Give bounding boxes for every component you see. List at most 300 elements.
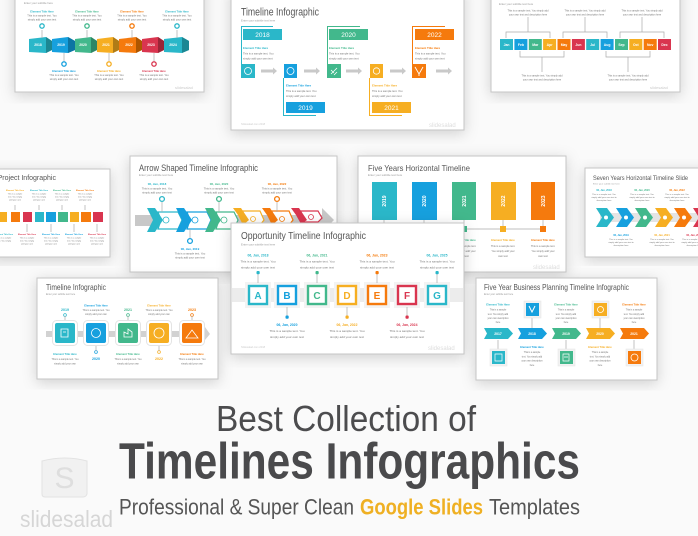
descriptions below [522,74,649,82]
lower descriptions: simply add your own [54,362,77,366]
upper dates: simply add your own text to [664,196,690,199]
upper descriptions: Element Title Here [30,189,49,192]
upper descriptions: This is a sample [490,310,507,312]
top labels and markers [27,10,192,61]
date markers: This is a sample text. You [175,252,206,256]
upper dates: This is a sample text. You [299,260,335,264]
lower descriptions: Element Title Here [588,345,612,349]
lower descriptions: This is a sample text. You [51,358,79,361]
chevrons [596,208,698,227]
year bars: 2020 [422,195,428,207]
lower descriptions [0,233,107,246]
upper dates [240,254,455,270]
lower dates: description here [614,244,629,247]
upper dates: This is a sample text. You [592,193,617,196]
panel: left project timeline slide [0,169,110,257]
slide subtitle: Enter your subtitle text here [241,18,276,22]
milestone 2019 [284,64,325,116]
upper descriptions: text. You simply [55,196,69,198]
gray band [600,213,698,222]
slide subtitle: Enter your subtitle text here [139,173,174,177]
lower descriptions: This is a sample [592,352,609,354]
logo: slidesalad: slidesalad [20,506,113,532]
upper dates: description here [670,199,685,202]
milestone 2022: Element Title Here [415,46,441,50]
lower dates: 06, Jan, 2019 [613,234,629,237]
milestone 2018: This is a sample text. You [243,52,274,56]
panel: arrow shaped timeline slide [130,156,337,272]
letter boxes A to G: D [343,291,351,302]
top labels and markers: simply add your own text [163,18,192,22]
top labels and markers: This is a sample text. You [162,14,192,18]
year arrows: 2017 [494,332,502,336]
milestone 2020: Element Title Here [329,46,355,50]
slide footer: Slidesalad.com 2018 [241,122,266,126]
upper descriptions: simply add your own [85,313,108,316]
upper descriptions: This is a sample [558,310,575,312]
lower descriptions: add your own [91,244,103,246]
lower descriptions: your own description [521,360,543,362]
panel: seven years horizontal timeline slide [585,168,698,257]
element descriptions: own text [459,254,469,258]
year arrows: 2020 [596,332,604,336]
lower descriptions: Element Title Here [65,233,84,236]
chevrons [147,208,322,232]
3D year bars: 2019 [57,43,65,47]
upper descriptions: your own description [555,317,577,320]
milestone 2018: Element Title Here [243,46,269,50]
element descriptions: own text [498,254,508,258]
descriptions above: This is a sample text. You simply add [622,10,663,12]
upper descriptions [486,302,646,324]
upper dates: This is a sample text. You [419,260,455,264]
lower dates: simply add your own text to [649,241,675,244]
upper dates: This is a sample text. You [665,193,690,196]
month boxes: Jul [590,43,595,47]
icon tiles [490,301,643,366]
logo: slidesalad [20,458,113,532]
upper descriptions: Element Title Here [53,189,72,192]
month boxes: Nov [647,43,654,47]
lower descriptions: add your own [68,244,80,246]
slide subtitle: Enter your subtitle text here [499,2,534,6]
lower descriptions: This is a sample [20,238,35,240]
slide footer: Slidesalad.com 2018 [241,345,266,349]
3D year bars: 2022 [125,43,133,47]
year bars: 2019 [382,195,388,207]
3D year bars: 2021 [102,43,110,47]
connector brackets [506,17,664,72]
upper dates: simply add your own text to [591,196,617,199]
lower descriptions: This is a sample [90,238,105,240]
milestone 2019: This is a sample text. You [286,89,317,93]
panel: top-right monthly timeline slide [491,0,680,92]
top labels and markers: Element Title Here [30,10,54,14]
lower descriptions: add your own [21,244,33,246]
date markers: simply add your own text [204,190,234,194]
lower descriptions: Element Title Here [88,233,107,236]
upper descriptions: here [564,321,569,324]
upper dates: simply add your own text [300,266,334,270]
3D year bars: 2024 [169,43,177,47]
lower descriptions: This is a sample text. You [178,358,206,361]
date markers: simply add your own text [142,190,172,194]
upper descriptions: add your own [56,200,68,202]
descriptions above: your own text and description here [509,14,548,16]
lower descriptions: This is a sample [44,238,59,240]
upper dates: 06, Jan, 2018 [596,189,612,192]
year bars: 2021 [462,195,468,207]
date markers: simply add your own text [262,190,292,194]
lower dates: 06, Jan, 2021 [654,234,670,237]
letter boxes A to G: G [433,291,441,302]
upper descriptions: Element Title Here [147,304,171,308]
upper descriptions: your own description [487,317,509,320]
milestone 2019: Element Title Here [286,84,312,88]
upper dates: 06, Jan, 2023 [367,254,388,258]
date markers: This is a sample text. You [142,186,173,190]
upper descriptions: text. You simply add [624,313,645,316]
month boxes: Jan [504,43,509,47]
slide title: Arrow Shaped Timeline Infographic [139,163,258,173]
upper dates: 06, Jan, 2021 [307,254,328,258]
upper descriptions: text. You simply [78,196,92,198]
upper descriptions: Element Title Here [554,302,578,306]
letter boxes A to G: C [313,291,321,302]
milestone 2020: simply add your own text [329,56,359,60]
date markers: 06, Jan, 2019 [181,247,200,251]
element descriptions: You simply add your [491,249,515,253]
panel: top-left 3D timeline slide [15,0,204,92]
upper descriptions: text. You simply [8,196,22,198]
upper descriptions: This is a sample [8,194,23,196]
lower dates [608,234,698,247]
top labels and markers: This is a sample text. You [72,14,102,18]
upper descriptions: This is a sample [55,194,70,196]
lower descriptions: Element Title Here [18,233,37,236]
upper descriptions: This is a sample text. You [82,309,110,312]
upper descriptions [6,189,95,202]
year arrows: 2021 [630,332,638,336]
top labels and markers: This is a sample text. You [117,14,147,18]
bottom labels and markers: Element Title Here [97,69,121,73]
bottom labels and markers: Element Title Here [52,69,76,73]
slide watermark: slidesalad [429,123,456,129]
gray arrow band [135,208,334,232]
upper descriptions: text. You simply add [556,313,577,316]
lower descriptions: Element Title Here [116,352,140,356]
lower descriptions: This is a sample [67,238,82,240]
month boxes: Sep [618,43,625,47]
upper descriptions: Element Title Here [6,189,25,192]
3D year bars: 2018 [34,43,42,47]
lower descriptions: text. You simply add [522,356,543,358]
year arrows: 2018 [528,332,536,336]
top labels and markers: This is a sample text. You [27,14,57,18]
upper descriptions: This is a sample [626,310,643,312]
upper dates: This is a sample text. You [240,260,276,264]
upper descriptions: simply add your own [148,313,171,316]
top labels and markers: simply add your own text [118,18,147,22]
tagline: Google Slides [360,494,483,520]
lower descriptions: text. You simply [67,240,81,242]
upper descriptions: add your own [79,200,91,202]
lower descriptions [51,352,206,366]
milestone 2022 [412,26,454,78]
bottom labels and markers: simply add your own text [50,77,79,81]
bottom labels and markers: This is a sample text. You [94,73,124,77]
lower dates: This is a sample text. You [650,238,675,241]
descriptions below: your own text and description here [523,78,562,82]
upper dates: 06, Jan, 2018 [248,254,269,258]
milestone 2021: This is a sample text. You [372,89,403,93]
lower dates: simply add your own text [390,335,424,339]
year labels and markers: 2020 [92,357,100,361]
upper dates: description here [597,199,612,202]
bottom labels and markers: Element Title Here [142,69,166,73]
milestone 2020: 2020 [341,32,356,39]
month boxes: Feb [518,43,524,47]
year bars: 2023 [541,195,547,207]
slide subtitle: Enter your subtitle text here [593,182,621,186]
upper descriptions: Element Title Here [84,304,108,308]
upper descriptions: Element Title Here [486,302,510,306]
slide watermark: slidesalad [428,346,455,352]
top labels and markers: Element Title Here [165,10,189,14]
upper descriptions: here [496,321,501,324]
heading: best collection of: Best Collection of [216,398,477,439]
slide subtitle: Enter your subtitle text here [484,293,514,296]
tagline: Templates [489,494,580,520]
date markers: simply add your own text [175,256,205,260]
year arrows: 2019 [562,332,570,336]
year arrows [484,328,649,339]
slide watermark: slidesalad [175,85,193,90]
element descriptions: Element Title Here [452,238,476,242]
milestone 2021 [370,64,411,116]
milestone 2020 [327,26,368,78]
upper dates [591,189,690,202]
top labels and markers: Element Title Here [120,10,144,14]
milestone 2021: simply add your own text [372,94,402,98]
upper dates: 06, Jan, 2025 [427,254,448,258]
lower descriptions: text. You simply [90,240,104,242]
year labels and markers: 2022 [155,357,163,361]
upper descriptions: Element Title Here [622,302,646,306]
slide subtitle: Enter your subtitle here [24,1,53,5]
upper descriptions: This is a sample text. You [145,309,173,312]
month boxes: Dec [661,43,668,47]
element descriptions: You simply add your [531,249,555,253]
panel: opportunity timeline slide [231,223,464,354]
date markers: 06, Jan, 2022 [268,182,287,186]
lower descriptions: This is a sample text. You [114,358,142,361]
month boxes: Mar [532,43,539,47]
lower dates: 06, Jan, 2022 [337,323,358,327]
milestone 2018: 2018 [255,32,270,39]
milestone 2019: simply add your own text [286,94,316,98]
milestone 2022: 2022 [427,32,442,39]
3D year bars [29,37,189,53]
element descriptions: This is a sample text. [452,244,476,248]
upper descriptions: text. You simply add [488,313,509,316]
slide title: Timeline Infographic [241,6,319,18]
lower descriptions: This is a sample [524,352,541,354]
descriptions below: This is a sample text. You simply add [522,74,563,78]
date markers: This is a sample text. You [204,186,235,190]
descriptions above: your own text and description here [623,14,662,16]
logo: slidesalad: S [54,462,75,495]
3D year bars: 2020 [79,43,87,47]
element descriptions: You simply add your [452,249,476,253]
timeline with square markers [380,220,546,232]
element descriptions: own text [538,254,548,258]
slide watermark: slidesalad [533,265,560,271]
element descriptions: This is a sample text. [491,244,515,248]
lower dates: simply add your own text [330,335,364,339]
year bars: 2022 [501,195,507,207]
slide title: Five Year Business Planning Timeline Infographic [484,282,630,292]
letter boxes A to G: E [374,291,381,302]
bottom labels and markers: simply add your own text [95,77,124,81]
upper dates: 06, Jan, 2022 [669,189,685,192]
bottom labels and markers [49,62,169,81]
panel: top-center timeline slide [231,0,464,130]
upper descriptions [82,304,173,316]
descriptions below: This is a sample text. You simply add [608,74,649,78]
tagline: Professional & Super Clean [119,494,354,520]
heading: timelines infographics: Timelines Infographics [119,432,580,490]
upper dates: simply add your own text [420,266,454,270]
year labels and markers [61,308,196,361]
lower dates: simply add your own text [270,335,304,339]
milestone 2022: simply add your own text [415,56,445,60]
upper dates: simply add your own text [241,266,275,270]
arrows between milestones [261,68,452,74]
upper descriptions: add your own [33,200,45,202]
year labels and markers: 2021 [124,308,132,312]
milestone 2018 [241,26,282,78]
letter boxes A to G: A [254,291,262,302]
slide title: Opportunity Timeline Infographic [241,230,366,242]
lower dates: This is a sample text. You [269,329,305,333]
milestone 2021: 2021 [384,105,399,112]
bottom labels and markers: This is a sample text. You [49,73,79,77]
3D year bars: 2023 [147,43,155,47]
upper dates: 06, Jan, 2020 [634,189,650,192]
lower descriptions [520,345,612,367]
panel: lower-left timeline slide [37,278,218,379]
lower descriptions: add your own [45,244,57,246]
lower dates: simply add your own text to [608,241,634,244]
descriptions above [508,10,663,16]
lower descriptions: here [598,364,603,367]
year bars [372,182,555,220]
lower descriptions: simply add your own [181,362,204,366]
connectors [498,318,634,349]
slide subtitle: Enter your subtitle text here [241,242,276,246]
lower descriptions: here [530,364,535,367]
top labels and markers: simply add your own text [73,18,102,22]
top labels and markers: Element Title Here [75,10,99,14]
lower dates: 06, Jan, 2020 [277,323,298,327]
upper dates: simply add your own text [360,266,394,270]
year labels and markers: 2023 [188,308,196,312]
month boxes [500,39,671,50]
month boxes: Oct [633,43,639,47]
gray timeline arrow [46,327,210,340]
date markers: 06, Jan, 2018 [148,182,167,186]
descriptions above: This is a sample text. You simply add [564,10,606,12]
letter boxes A to G: B [283,291,291,302]
month boxes: Jun [575,43,581,47]
upper descriptions: your own description [623,317,645,320]
icon tiles [52,320,204,346]
lower dates: This is a sample text. You [389,329,425,333]
date markers [142,182,293,260]
tagline [119,494,580,520]
bottom labels and markers: simply add your own text [140,77,169,81]
lower descriptions: Element Title Here [180,352,204,356]
lower descriptions: Element Title Here [520,345,544,349]
month boxes: May [561,43,567,47]
month boxes: Apr [547,43,553,47]
letter boxes A to G [245,282,450,308]
panel: five years horizontal timeline slide [358,156,566,272]
month boxes: Aug [604,43,610,47]
milestone 2020: This is a sample text. You [329,52,360,56]
top labels and markers: simply add your own text [28,18,57,22]
descriptions above: your own text and description here [566,14,605,16]
lower descriptions: text. You simply [44,240,58,242]
lower dates [269,323,425,339]
element descriptions [452,238,555,258]
lower descriptions: text. You simply add [590,356,611,358]
lower dates: This is a sample text. You [329,329,365,333]
upper descriptions: add your own [9,200,21,202]
upper descriptions: This is a sample [78,194,93,196]
gray band [232,288,463,302]
milestone 2018: simply add your own text [243,56,273,60]
date markers: This is a sample text. You [262,186,293,190]
letter boxes A to G: F [404,291,410,302]
upper descriptions: Element Title Here [76,189,95,192]
lower dates: This is a sample text. You [609,238,634,241]
upper dates: This is a sample text. You [630,193,655,196]
descriptions above: This is a sample text. You simply add [508,10,549,12]
milestone 2022: This is a sample text. You [415,52,446,56]
lower descriptions: Element Title Here [42,233,61,236]
upper descriptions: text. You simply [32,196,46,198]
slide subtitle: Enter your subtitle text here [46,293,76,296]
upper dates: This is a sample text. You [359,260,395,264]
date markers: 06, Jan, 2020 [210,182,229,186]
milestone 2021: Element Title Here [372,84,398,88]
element descriptions: Element Title Here [531,238,555,242]
lower descriptions: Element Title Here [53,352,77,356]
descriptions below: your own text and description here [609,78,648,82]
bottom labels and markers: This is a sample text. You [139,73,169,77]
year labels and markers: 2019 [61,308,69,312]
lower descriptions: text. You simply [20,240,34,242]
upper dates: description here [635,199,650,202]
element descriptions: Element Title Here [491,238,515,242]
panel: five year business planning slide [476,278,657,380]
element descriptions: This is a sample text. [531,244,555,248]
upper dates: simply add your own text to [629,196,655,199]
slide subtitle: Enter your subtitle text here [368,173,403,177]
upper descriptions: here [632,321,637,324]
